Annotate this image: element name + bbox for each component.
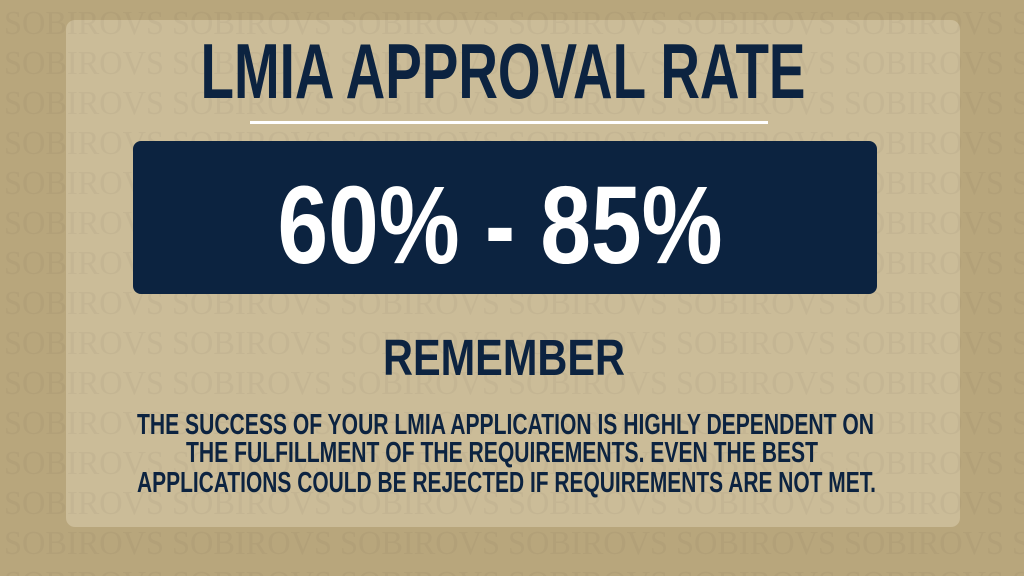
panel: main card [66,20,960,527]
rate number: 60% - 85% [278,164,722,287]
underline [250,121,768,124]
heading: remember: REMEMBER [383,329,625,386]
panel: rate box [133,141,877,294]
text block: body [137,409,876,499]
